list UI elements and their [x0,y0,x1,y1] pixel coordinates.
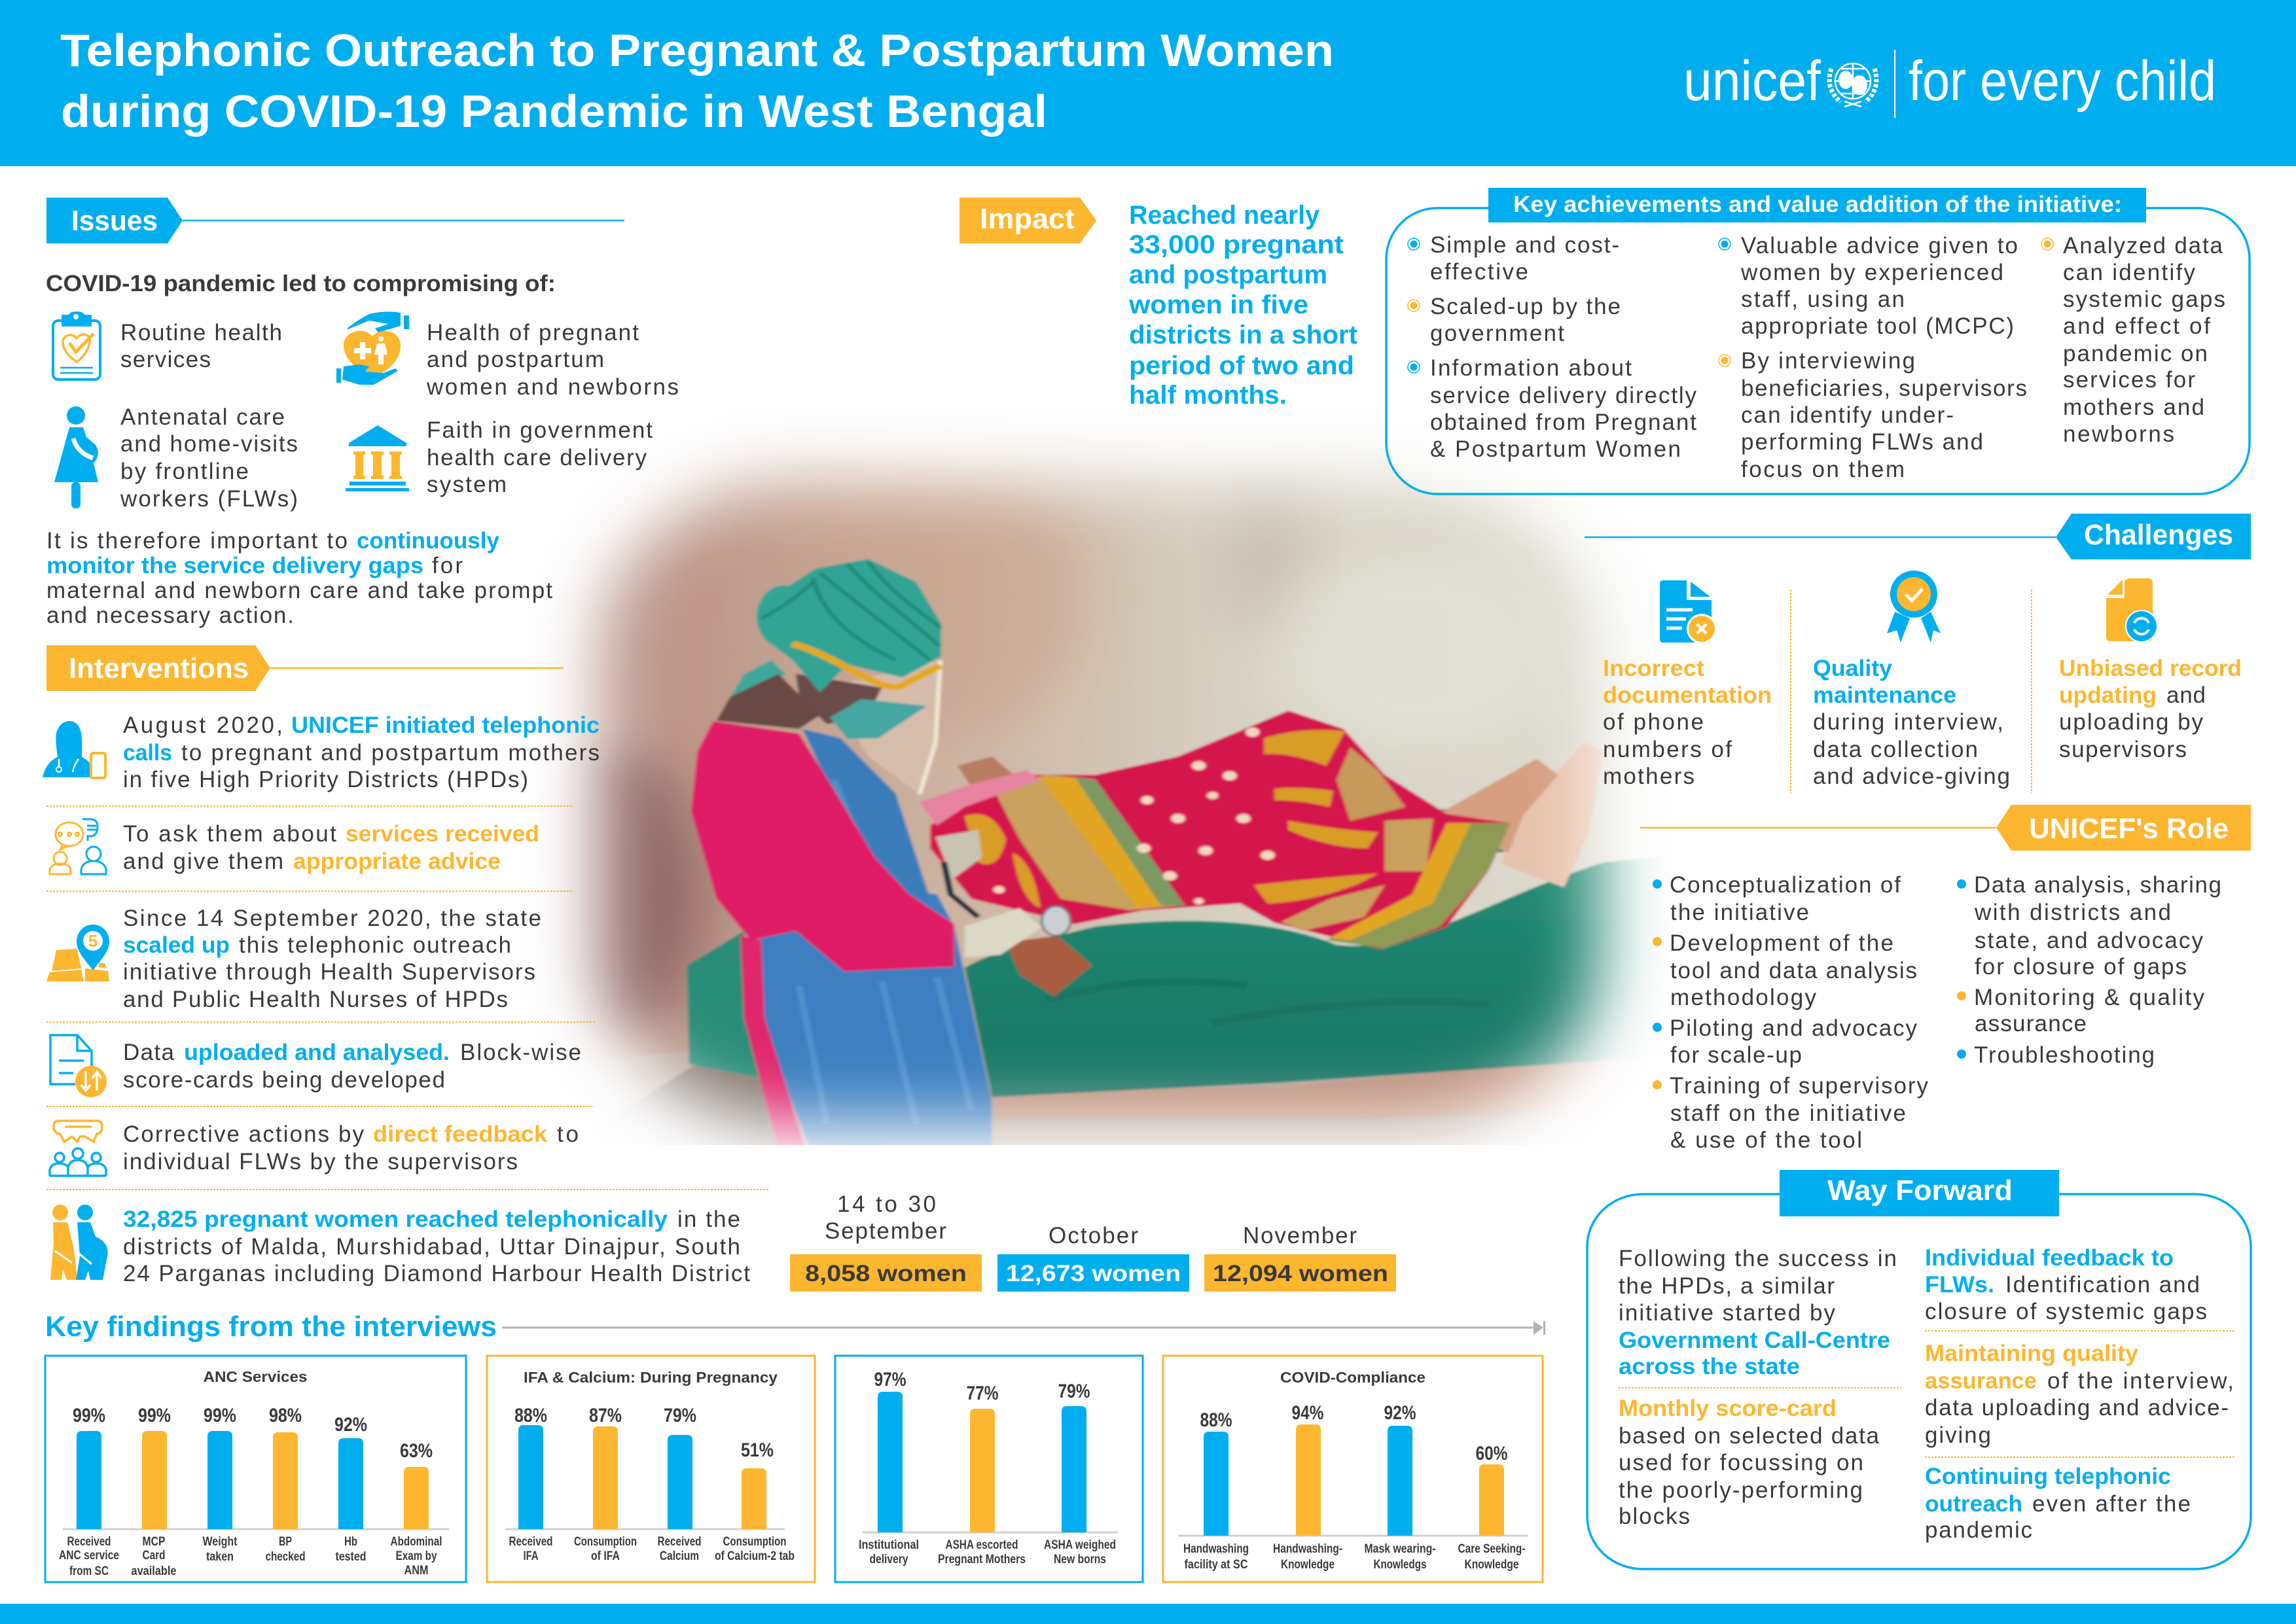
footer band [0,1604,2296,1624]
text: antenatal care: workers (FLWs) [120,486,298,512]
icon: hands holding heart [336,311,409,385]
heading: Interventions: Interventions [69,652,249,684]
text: way forward right column: FLWs. [1925,1272,1994,1297]
text: way forward left column [1619,1246,1901,1529]
panel: ANC Services chart: 99% [138,1405,171,1426]
text: unbiased record updating: supervisors [2059,737,2187,762]
panel: ANC Services chart [45,1356,466,1582]
text: way forward right column: Continuing telephonic [1925,1464,2171,1489]
text: faith in government: Faith in government [427,417,653,443]
icon: conversation [50,819,106,874]
text: issues intro: COVID-19 pandemic led to compromising of: [46,271,556,296]
panel: IFA and Calcium chart: Consumption [574,1535,637,1549]
panel: COVID-Compliance chart: facility at SC [1185,1558,1248,1572]
heading: Challenges: Challenges [2084,519,2233,551]
panel: key achievements [1386,188,2250,494]
text: quality maintenance: Quality [1813,656,1893,681]
text: routine health services [120,320,282,372]
icon: pregnant woman [54,406,98,508]
text: way forward left column: based on selected data [1619,1423,1880,1449]
panel: ANC Services chart: 63% [400,1440,433,1462]
text: intervention 5 [123,1121,579,1174]
list: UNICEF role left: tool and data analysis [1670,958,1917,983]
heading: Challenges [1585,514,2251,559]
text: antenatal care: by frontline [120,459,249,484]
panel: COVID-Compliance chart: Mask wearing- [1364,1542,1436,1556]
text: impact statement: half months. [1129,381,1287,410]
text: way forward right column: outreach [1925,1491,2022,1517]
list: UNICEF role left: & use of the tool [1670,1127,1862,1153]
panel: ANC Services chart: Received [67,1535,111,1549]
stat: September count: September [825,1218,946,1244]
text: incorrect documentation: documentation [1603,682,1772,708]
list: achievements column 1: Simple and cost- [1430,232,1619,258]
panel: ANC Services chart: BP [279,1535,292,1549]
text: impact statement: period of two and [1129,351,1354,380]
text: quality maintenance: data collection [1813,737,1978,762]
list: UNICEF role left: for scale-up [1670,1042,1802,1068]
text: intervention 2: appropriate advice [293,849,501,874]
panel: IFA and Calcium chart: IFA & Calcium: During Pregnancy [524,1369,778,1386]
list: achievements column 3 [2041,233,2225,447]
list: UNICEF role left: methodology [1670,985,1817,1010]
panel: IFA and Calcium chart: of Calcium-2 tab [715,1549,795,1563]
text: health of pregnant women: and postpartum [427,347,604,372]
panel: ANC Services chart: ANC Services [203,1368,308,1385]
text: intervention 1: calls [123,740,172,766]
text: routine health services: services [120,347,211,372]
panel: delivery chart [835,1356,1143,1582]
icon: unbiased record document [2106,578,2158,643]
text: way forward right column: assurance [1925,1368,2037,1394]
panel: ANC Services chart: from SC [69,1564,109,1578]
text: routine health services: Routine health [120,320,282,345]
panel: COVID-Compliance chart: Care Seeking- [1458,1542,1525,1556]
text: health of pregnant women: women and newborns [426,374,679,400]
panel: IFA and Calcium chart: Received [657,1535,702,1549]
panel: ANC Services chart: 99% [73,1405,105,1426]
heading: UNICEF's Role [1640,805,2251,851]
text: intervention 1: August 2020, [123,713,283,738]
text: 32,825 women reached: districts of Malda, Murshidabad, Uttar Dinajpur, South [123,1234,740,1260]
panel: ANC Services chart: ANM [404,1564,428,1578]
panel: COVID-Compliance chart [1163,1356,1543,1582]
photo: health worker examining a pregnant woman [550,435,1656,1145]
heading: Impact: Impact [980,203,1075,235]
list: achievements column 3: newborns [2063,421,2174,447]
panel: COVID-Compliance chart: Knowledge [1465,1558,1518,1572]
text: intervention 1 [123,713,600,792]
text: incorrect documentation [1603,656,1772,789]
text: impact statement: women in five [1128,291,1308,319]
panel: IFA and Calcium chart: Calcium [660,1549,699,1563]
text: antenatal care: and home-visits [120,431,298,457]
stat: September count: 8,058 women [805,1261,967,1286]
text: continuously monitor [46,528,552,628]
list: achievements column 2: focus on them [1741,457,1905,482]
text: health of pregnant women [426,320,679,400]
text: continuously monitor: It is therefore important to [46,528,348,554]
text: incorrect documentation: Incorrect [1603,656,1704,681]
text: intervention 3: Since 14 September 2020, the state [123,906,541,931]
text: way forward right column: giving [1925,1422,1991,1448]
text: intervention 3 [123,906,541,1012]
icon: quality ribbon [1887,571,1941,643]
icon: map pin with number 5: 5 [88,931,98,951]
text: unbiased record updating [2059,656,2242,762]
panel: ANC Services chart: Card [143,1549,165,1562]
text: intervention 4: Block-wise [460,1040,581,1065]
panel: ANC Services chart: taken [206,1550,234,1564]
text: way forward right column: Identification and [2005,1272,2200,1297]
text: way forward right column: pandemic [1925,1517,2032,1543]
panel: COVID-Compliance chart: 60% [1475,1443,1508,1464]
panel: COVID-Compliance chart: COVID-Compliance [1280,1369,1426,1386]
heading: way forward [1780,1170,2059,1216]
list: UNICEF role right: state, and advocacy [1975,928,2203,953]
text: incorrect documentation: mothers [1603,764,1695,789]
list: achievements column 2: can identify under- [1741,402,1954,428]
list: UNICEF role right [1957,872,2221,1068]
list: UNICEF role left: Piloting and advocacy [1670,1015,1918,1041]
heading: key achievements [1488,188,2146,222]
panel: COVID-Compliance chart: Knowledgs [1373,1558,1427,1572]
list: UNICEF role left: Development of the [1670,930,1893,956]
text: intervention 5: direct feedback [373,1121,548,1147]
text: antenatal care [120,404,298,512]
panel: way forward [1587,1170,2251,1569]
text: unbiased record updating: Unbiased record [2059,656,2242,681]
heading: Interventions [46,645,564,691]
text: intervention 2: To ask them about [123,821,336,847]
list: achievements column 1: effective [1430,259,1528,285]
text: continuously monitor: continuously [357,528,500,554]
icon: data upload document [50,1035,107,1097]
list: achievements column 1: Scaled-up by the [1430,294,1621,319]
panel: COVID-Compliance chart: Handwashing [1183,1542,1249,1556]
list: achievements column 2: beneficiaries, supervisors [1741,376,2027,401]
list: UNICEF role left: Training of supervisory [1670,1073,1928,1099]
list: achievements column 1: obtained from Pregnant [1430,410,1696,435]
text: way forward left column: Government Call-Centre [1619,1328,1890,1353]
list: UNICEF role left: Conceptualization of [1670,872,1901,898]
text: intervention 4: uploaded and analysed. [184,1040,450,1065]
list: achievements column 2: appropriate tool (MCPC) [1741,313,2014,339]
text: antenatal care: Antenatal care [120,404,285,430]
list: achievements column 1: Information about [1430,355,1632,381]
text: incorrect documentation: numbers of [1603,737,1732,762]
stat: October count: October [1049,1223,1138,1248]
list: achievements column 2: Valuable advice given to [1741,233,2018,258]
icon: clipboard with heart [53,311,100,380]
icon: doctor with phone [43,721,105,778]
panel: IFA and Calcium chart [487,1356,815,1582]
text: way forward left column: Following the success in [1619,1246,1897,1271]
panel: ANC Services chart: 99% [204,1405,236,1426]
text: way forward right column: closure of systemic gaps [1925,1299,2207,1324]
stat: October count: 12,673 women [1006,1261,1181,1286]
text: way forward left column: blocks [1619,1504,1690,1529]
text: unbiased record updating: uploading by [2059,709,2203,735]
text: impact statement: Reached nearly [1129,201,1320,230]
panel: delivery chart: Institutional [859,1538,919,1552]
panel: ANC Services chart: Hb [344,1535,357,1549]
heading: Impact [960,198,1096,243]
title: during COVID-19 Pandemic in West Bengal [61,86,1047,137]
text: impact statement: and postpartum [1129,260,1327,289]
panel: delivery chart: Pregnant Mothers [938,1553,1026,1566]
logo: unicef for every child [1683,50,2216,118]
text: intervention 3: scaled up [123,932,230,958]
panel: ANC Services chart: Abdominal [390,1535,442,1549]
panel: IFA and Calcium chart: Consumption [723,1535,787,1549]
text: intervention 2: and give them [123,849,283,874]
panel: IFA and Calcium chart: 51% [741,1439,774,1461]
list: achievements column 3: Analyzed data [2063,233,2223,258]
text: incorrect documentation: of phone [1603,709,1704,735]
list: achievements column 3: systemic gaps [2063,287,2225,312]
panel: delivery chart: ASHA escorted [945,1538,1018,1552]
text: way forward left column: initiative started by [1619,1300,1835,1326]
panel: COVID-Compliance chart: 94% [1292,1402,1323,1424]
list: achievements column 3: and effect of [2063,313,2210,339]
heading: key achievements: Key achievements and value addition of the initiative: [1513,192,2122,217]
text: intervention 2: services received [346,821,539,847]
text: continuously monitor: for [432,553,463,578]
panel: IFA and Calcium chart: Received [509,1535,552,1549]
text: 32,825 women reached: 24 Parganas including Diamond Harbour Health District [123,1261,750,1286]
stat: November count: November [1243,1223,1357,1248]
text: continuously monitor: monitor the service delivery gaps [46,553,423,578]
text: quality maintenance: and advice-giving [1813,764,2010,789]
list: UNICEF role left: the initiative [1670,900,1809,925]
text: intervention 5: Corrective actions by [123,1121,364,1147]
list: achievements column 3: services for [2063,367,2195,393]
panel: IFA and Calcium chart: 88% [514,1405,547,1426]
text: intervention 1: to pregnant and postpartum mothers [181,740,600,766]
list: UNICEF role left [1653,872,1928,1153]
panel: IFA and Calcium chart: 79% [664,1405,696,1426]
list: UNICEF role right: Troubleshooting [1974,1042,2155,1068]
panel: ANC Services chart: ANC service [59,1549,119,1562]
text: intervention 4: Data [123,1040,175,1065]
heading: way forward: Way Forward [1827,1174,2013,1207]
text: faith in government: health care delivery [427,445,647,470]
text: intervention 2 [123,821,539,874]
text: way forward left column: the poorly-performing [1619,1477,1863,1503]
text: way forward left column: Monthly score-card [1619,1396,1837,1421]
text: way forward right column [1925,1245,2234,1543]
text: impact statement: 33,000 pregnant [1129,230,1344,259]
panel: IFA and Calcium chart: of IFA [591,1549,620,1563]
list: UNICEF role left: staff on the initiative [1670,1101,1906,1126]
panel: COVID-Compliance chart: Handwashing- [1273,1542,1342,1556]
heading: UNICEF's Role: UNICEF's Role [2029,813,2229,845]
icon: map pin with number 5 [46,925,109,981]
heading: key findings [45,1311,1545,1343]
text: way forward right column: Maintaining quality [1925,1341,2139,1366]
heading: key findings: Key findings from the interviews [45,1311,497,1343]
icon: feedback group [50,1121,106,1176]
list: achievements column 3: can identify [2063,260,2195,285]
text: way forward right column: even after the [2032,1491,2191,1517]
text: way forward right column: of the interview, [2047,1368,2234,1394]
list: achievements column 1: service delivery directly [1430,383,1696,408]
text: 32,825 women reached [123,1207,750,1286]
panel: IFA and Calcium chart: 87% [589,1405,622,1426]
list: achievements column 3: mothers and [2063,395,2204,420]
list: achievements column 1: & Postpartum Women [1430,436,1681,462]
stat: November count [1204,1223,1396,1292]
text: way forward right column: Individual feedback to [1925,1245,2174,1271]
text: intervention 3: initiative through Health Supervisors [123,959,535,985]
list: achievements column 3: pandemic on [2063,341,2208,366]
text: intervention 1: in five High Priority Districts (HPDs) [123,767,528,792]
text: intervention 1: UNICEF initiated telephonic [291,713,600,738]
panel: delivery chart: 97% [874,1369,906,1390]
text: intervention 3: and Public Health Nurses of HPDs [123,987,508,1012]
panel: delivery chart: delivery [869,1553,908,1566]
text: quality maintenance: during interview, [1813,709,2003,735]
panel: COVID-Compliance chart: Knowledge [1281,1558,1335,1572]
text: way forward left column: across the state [1619,1354,1800,1379]
text: quality maintenance [1813,656,2010,789]
list: achievements column 2: By interviewing [1741,348,1915,374]
panel: ANC Services chart: 98% [269,1405,302,1426]
stat: September count [790,1192,982,1292]
list: achievements column 1: government [1430,321,1564,346]
text: health of pregnant women: Health of pregnant [427,320,639,345]
list: achievements column 2: women by experienced [1740,260,2003,285]
list: achievements column 1 [1408,232,1696,462]
panel: COVID-Compliance chart: 88% [1200,1409,1232,1431]
panel: ANC Services chart: 92% [334,1414,367,1436]
stat: October count [997,1223,1189,1292]
panel: COVID-Compliance chart: 92% [1384,1402,1416,1424]
list: UNICEF role right: assurance [1975,1011,2087,1036]
title: Telephonic Outreach to Pregnant & Postpartum Women [60,25,1334,76]
text: way forward left column: the HPDs, a similar [1619,1273,1835,1299]
text: faith in government [427,417,653,497]
list: UNICEF role right: Monitoring & quality [1974,985,2204,1010]
list: UNICEF role right: Data analysis, sharing [1974,872,2221,898]
text: 32,825 women reached: in the [677,1207,740,1232]
panel: ANC Services chart: tested [335,1550,367,1564]
text: intervention 4 [123,1040,581,1093]
panel: IFA and Calcium chart: IFA [524,1549,539,1563]
header band [0,0,2296,166]
panel: ANC Services chart: Weight [203,1535,238,1549]
text: faith in government: system [427,472,507,497]
panel: delivery chart: 77% [966,1383,999,1404]
title [60,25,1334,137]
list: UNICEF role right: with districts and [1974,900,2171,925]
list: UNICEF role right: for closure of gaps [1975,954,2187,980]
icon: two pregnant women [50,1205,108,1280]
text: unbiased record updating: and [2166,682,2206,708]
text: impact statement [1128,201,1357,410]
text: 32,825 women reached: 32,825 pregnant women reached telephonically [123,1207,668,1232]
text: intervention 4: score-cards being developed [123,1067,445,1093]
panel: delivery chart: ASHA weighed [1044,1538,1116,1552]
text: intervention 3: this telephonic outreach [239,932,511,958]
text: continuously monitor: and necessary action. [46,603,294,628]
text: unbiased record updating: updating [2059,682,2157,708]
panel: ANC Services chart: Exam by [395,1549,437,1563]
heading: Issues [46,198,624,243]
logo: unicef for every child: unicef [1683,50,1821,113]
stat: November count: 12,094 women [1213,1261,1388,1286]
panel: ANC Services chart: checked [266,1550,305,1564]
text: intervention 5: individual FLWs by the supervisors [123,1149,518,1174]
icon: government building [346,425,409,491]
text: impact statement: districts in a short [1129,321,1357,349]
heading: Issues: Issues [71,205,158,237]
list: achievements column 2: performing FLWs and [1741,429,1983,455]
text: quality maintenance: maintenance [1813,682,1956,708]
text: way forward left column: used for focussing on [1619,1450,1863,1475]
panel: ANC Services chart: MCP [143,1535,166,1549]
icon: incorrect document [1660,580,1717,644]
list: achievements column 2 [1719,233,2027,482]
panel: ANC Services chart: available [131,1564,177,1578]
panel: delivery chart: New borns [1054,1553,1106,1566]
panel: delivery chart: 79% [1058,1381,1090,1402]
text: continuously monitor: maternal and newborn care and take prompt [46,578,552,603]
text: intervention 5: to [557,1121,579,1147]
logo: unicef for every child: for every child [1909,50,2216,113]
list: achievements column 2: staff, using an [1741,287,1905,312]
stat: September count: 14 to 30 [837,1192,936,1217]
text: way forward right column: data uploading and advice- [1925,1395,2229,1421]
